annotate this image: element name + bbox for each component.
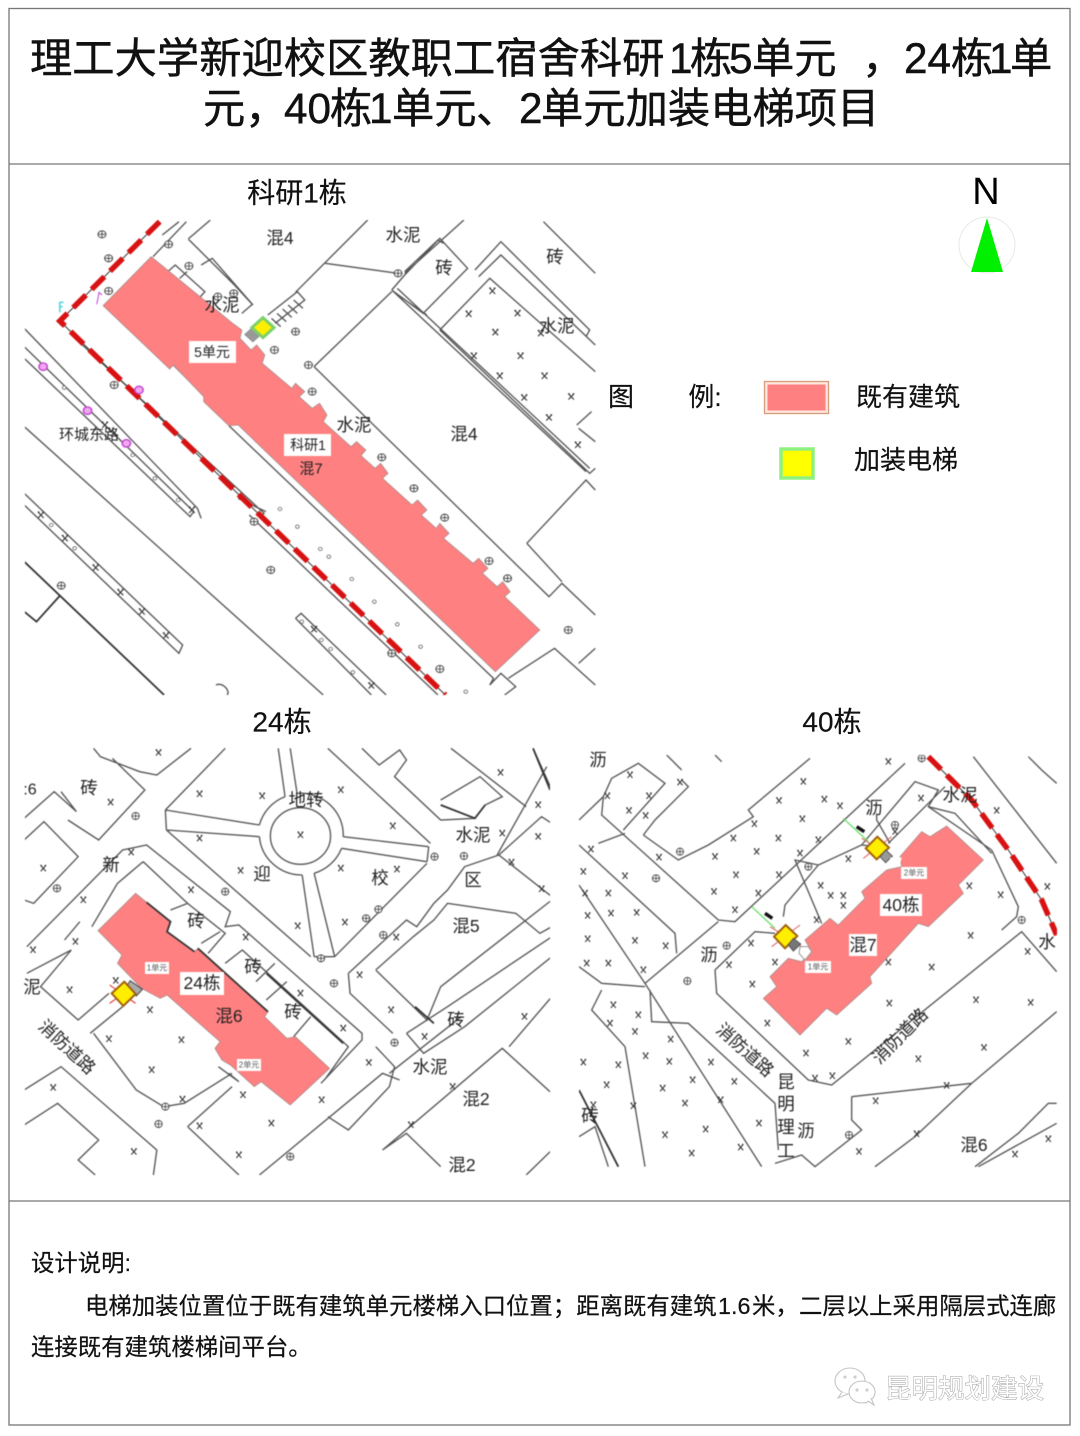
title: 、 xyxy=(476,85,518,132)
map labels: 40栋: 沥 xyxy=(797,1121,815,1141)
legend: 图 xyxy=(608,382,634,412)
map labels: 科研1栋: 5单元 xyxy=(194,344,230,360)
legend: 例: xyxy=(688,382,722,412)
map labels: 科研1栋: 水泥 xyxy=(204,295,240,315)
added elevator: 2单元 xyxy=(862,837,902,867)
title: 栋 xyxy=(330,85,372,132)
title: 单 xyxy=(1010,35,1052,82)
icon: wechat xyxy=(835,1368,875,1405)
watermark: 昆明规划建设 xyxy=(885,1374,1044,1404)
header divider xyxy=(9,163,1070,165)
design notes: 二层以上采用隔层式连廊 xyxy=(799,1293,1056,1319)
map labels: 40栋: 消防道路 xyxy=(868,1004,932,1068)
added elevator: 1单元 xyxy=(110,981,142,1006)
map labels: 40栋: 混7 xyxy=(849,935,877,955)
map labels: 科研1栋 xyxy=(59,225,574,478)
title: 单元加装电梯项目 xyxy=(541,85,879,132)
legend xyxy=(608,382,960,478)
map labels: 科研1栋: 混7 xyxy=(299,460,323,478)
map labels: 24栋: 1单元 xyxy=(147,962,167,972)
map labels: 科研1栋: 混4 xyxy=(266,228,294,248)
map labels: 24栋: 混6 xyxy=(215,1006,243,1026)
map labels: 40栋: 理 xyxy=(777,1117,795,1137)
map labels: 24栋: 砖 xyxy=(284,1002,302,1022)
map labels: 24栋: 水泥 xyxy=(412,1057,448,1077)
map labels: 40栋: 砖 xyxy=(581,1106,599,1126)
map labels: 24栋 xyxy=(23,778,490,1175)
map labels: 40栋: 水泥 xyxy=(942,785,978,805)
map labels: 40栋: 沥 xyxy=(700,945,718,965)
footer divider xyxy=(9,1200,1070,1202)
title xyxy=(30,35,1052,132)
added elevator: 1单元 xyxy=(770,925,812,960)
title: 40 xyxy=(284,85,331,132)
map labels: 科研1栋: 砖 xyxy=(546,247,564,267)
legend swatch: added elevator xyxy=(781,449,813,478)
map labels: 24栋: 水泥 xyxy=(456,825,490,845)
design notes: 设计说明: xyxy=(31,1250,131,1276)
map labels: 40栋: 消防道路 xyxy=(712,1019,778,1081)
map labels: 科研1栋: 水泥 xyxy=(386,225,420,245)
map labels: 24栋: 混2 xyxy=(462,1089,490,1109)
map labels: 科研1栋: 水泥 xyxy=(540,316,574,336)
map labels: 24栋: 区 xyxy=(464,870,482,890)
north arrow: N xyxy=(972,171,1000,213)
title: 1 xyxy=(369,85,393,132)
title: 2 xyxy=(519,85,543,132)
legend swatch: existing building xyxy=(764,382,828,414)
map labels: 40栋: 明 xyxy=(777,1094,795,1114)
map labels: 科研1栋: 水泥 xyxy=(336,415,372,435)
title: 24 xyxy=(904,35,951,82)
map labels: 24栋: 迎 xyxy=(253,864,271,884)
map labels: 40栋: 混6 xyxy=(960,1135,988,1155)
title: 理工大学新迎校区教职工宿舍科研 xyxy=(30,35,664,82)
design notes: 米， xyxy=(752,1293,799,1319)
map labels: 科研1栋: 环城东路 xyxy=(59,426,119,444)
map labels: 40栋 xyxy=(581,750,1056,1161)
map labels: 24栋: 地转 xyxy=(288,790,324,810)
map labels: 24栋: 新 xyxy=(102,855,120,875)
title: 单元 xyxy=(392,85,477,132)
map labels: 24栋: 砖 xyxy=(244,957,262,977)
heading: 科研1栋: 科研1栋 xyxy=(247,178,347,208)
map labels: 24栋: 校 xyxy=(371,868,389,888)
title: ， xyxy=(245,85,287,132)
map labels: 40栋: 昆 xyxy=(777,1072,795,1092)
existing building: 24栋 xyxy=(98,893,330,1105)
design notes: 连接既有建筑楼梯间平台。 xyxy=(31,1334,312,1360)
title: 元 xyxy=(203,85,245,132)
map labels: 40栋: 工 xyxy=(777,1141,795,1161)
title: 栋 xyxy=(690,35,732,82)
map labels: 24栋: 砖 xyxy=(80,778,98,798)
map labels: 40栋: 沥 xyxy=(865,798,883,818)
existing building: 40栋 xyxy=(763,826,983,1035)
map labels: 科研1栋: 砖 xyxy=(435,258,453,278)
map labels: 24栋: :6 xyxy=(23,782,37,798)
existing building: 科研1栋 xyxy=(103,257,540,672)
map labels: 24栋: 砖 xyxy=(447,1010,465,1030)
legend: 加装电梯 xyxy=(854,445,958,475)
added elevator: 5单元 xyxy=(245,318,274,342)
map labels: 40栋: 2单元 xyxy=(904,868,924,878)
map labels: 24栋: 24栋 xyxy=(184,973,220,993)
legend: 既有建筑 xyxy=(856,382,960,412)
map labels: 24栋: 2单元 xyxy=(239,1060,259,1070)
title: 1 xyxy=(989,35,1013,82)
design notes xyxy=(31,1250,1056,1360)
map labels: 24栋: 混5 xyxy=(452,916,480,936)
map labels: 24栋: 消防道路 xyxy=(35,1016,100,1079)
watermark xyxy=(835,1368,1044,1405)
title: 5 xyxy=(729,35,753,82)
map labels: 24栋: 混2 xyxy=(448,1155,476,1175)
map labels: 40栋: 1单元 xyxy=(808,962,828,972)
map: 24栋 xyxy=(23,748,552,1175)
map labels: 40栋: 水 xyxy=(1038,932,1056,952)
title: 1 xyxy=(669,35,693,82)
map labels: 24栋: 泥 xyxy=(23,977,41,997)
heading: 40栋: 40栋 xyxy=(802,706,862,738)
title: 栋 xyxy=(951,35,993,82)
map labels: 40栋: 40栋 xyxy=(883,895,919,915)
map labels: 科研1栋: 科研1 xyxy=(290,437,326,453)
map: 40栋 xyxy=(579,750,1057,1167)
map labels: 40栋: 沥 xyxy=(589,750,607,770)
heading: 24栋: 24栋 xyxy=(252,706,312,738)
design notes: 电梯加装位置位于既有建筑单元楼梯入口位置；距离既有建筑 xyxy=(85,1293,717,1319)
title: 单元 xyxy=(752,35,837,82)
map labels: 24栋: 砖 xyxy=(187,911,205,931)
north arrow xyxy=(959,171,1015,273)
map: 科研1栋 xyxy=(24,220,595,695)
design notes: 1.6 xyxy=(718,1293,751,1319)
title: ， xyxy=(862,35,904,82)
map labels: 科研1栋: 混4 xyxy=(450,424,478,444)
